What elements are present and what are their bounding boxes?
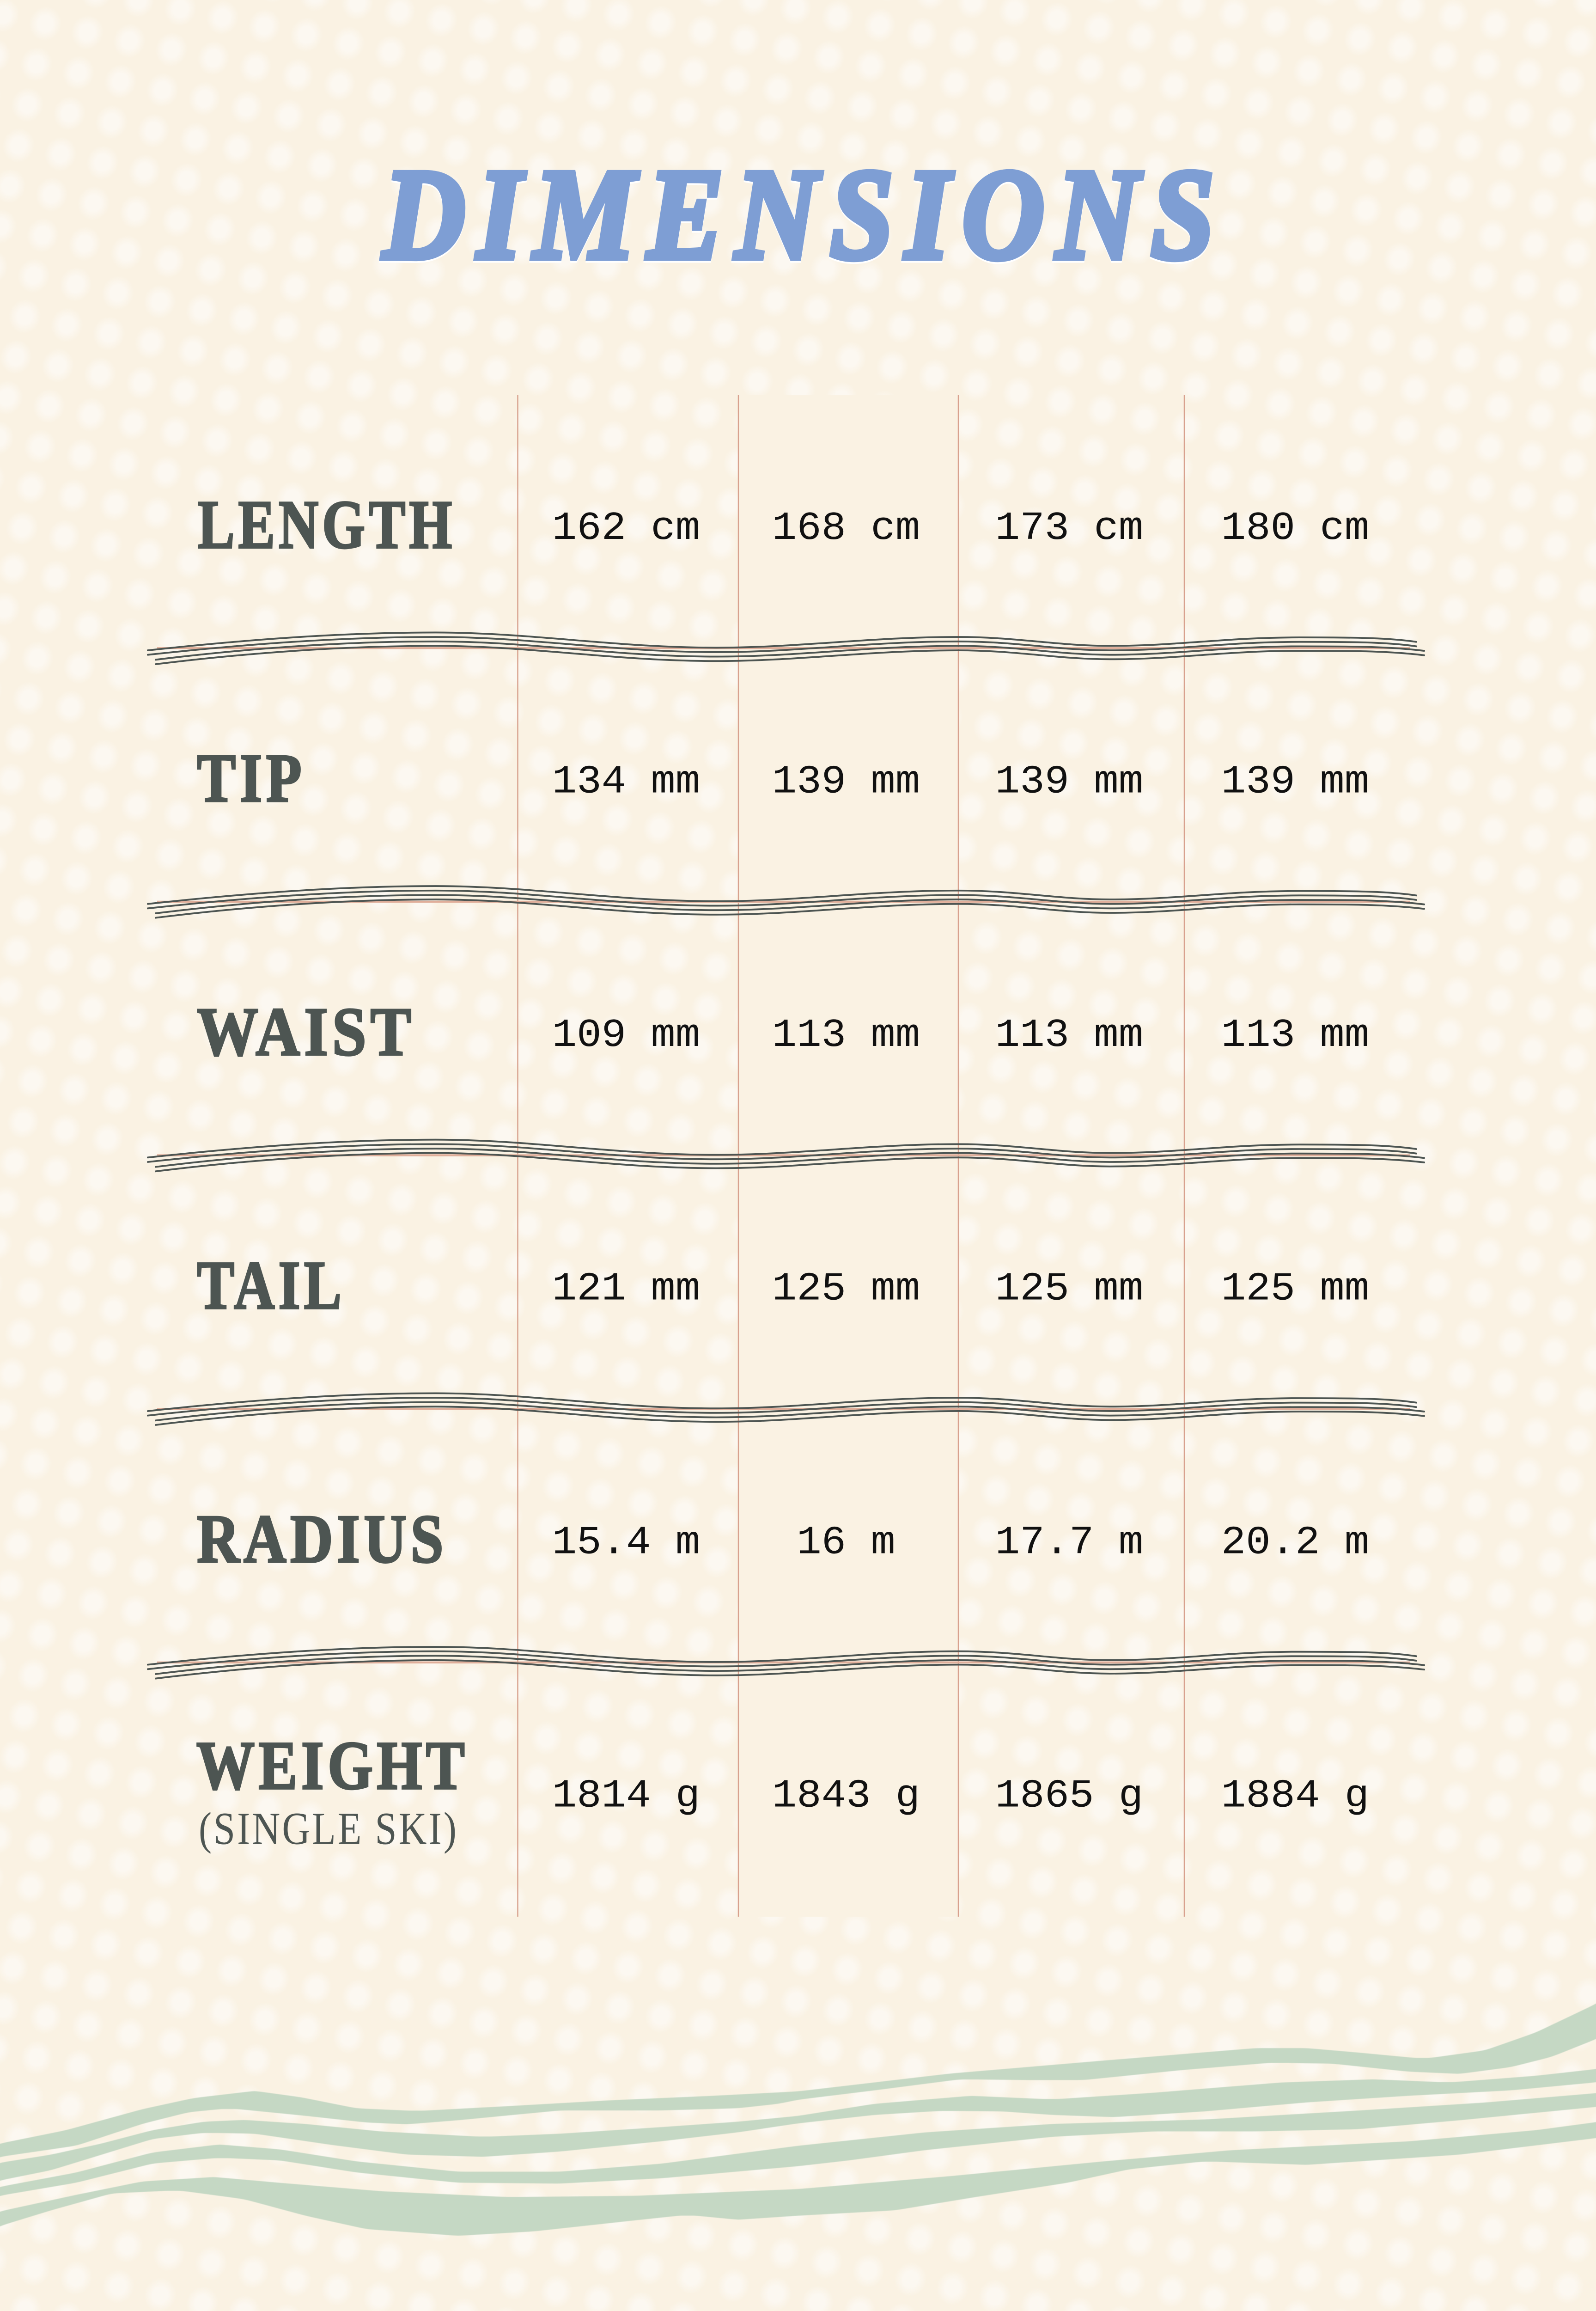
values: tip: 139 mm: [995, 760, 1143, 805]
row: tip: [197, 740, 1369, 816]
values: weight: 1814 g: [552, 1774, 700, 1819]
values: radius: 20.2 m: [1221, 1521, 1369, 1565]
values: waist: [552, 1013, 1369, 1058]
values: tip: 139 mm: [772, 760, 920, 805]
label: waist: WAIST: [197, 993, 415, 1070]
label: weight (single ski): WEIGHT: [196, 1727, 469, 1804]
row: waist: [197, 993, 1369, 1070]
values: length: 162 cm: [552, 506, 700, 551]
values: weight: [552, 1774, 1369, 1819]
values: weight: 1884 g: [1221, 1774, 1369, 1819]
values: waist: 109 mm: [552, 1013, 700, 1058]
values: waist: 113 mm: [995, 1013, 1143, 1058]
values: tail: 125 mm: [772, 1267, 920, 1312]
label: length: LENGTH: [198, 486, 456, 563]
values: length: 173 cm: [995, 506, 1143, 551]
values: tip: 134 mm: [552, 760, 700, 805]
values: tip: 139 mm: [1221, 760, 1369, 805]
values: length: [552, 506, 1369, 551]
values: radius: 15.4 m: [552, 1521, 700, 1565]
label: weight (single ski): [196, 1727, 469, 1854]
label: tip: TIP: [197, 740, 305, 816]
title: DIMENSIONS: [381, 143, 1226, 286]
title: DIMENSIONS: [381, 145, 1226, 288]
values: length: 168 cm: [772, 506, 920, 551]
label: tail: TAIL: [197, 1247, 345, 1323]
values: tail: [552, 1267, 1369, 1312]
decorative green wave bands: [0, 1981, 1596, 2244]
panel: highlighted second column: [738, 395, 958, 1917]
row: radius: [197, 1500, 1369, 1577]
row: length: [198, 486, 1369, 563]
row dividers: wavy lines: [148, 632, 1424, 1679]
values: weight: 1865 g: [995, 1774, 1143, 1819]
row: tail: [197, 1247, 1369, 1323]
label: weight (single ski): (SINGLE SKI): [199, 1803, 458, 1854]
values: waist: 113 mm: [772, 1013, 920, 1058]
values: tail: 121 mm: [552, 1267, 700, 1312]
table: [148, 395, 1424, 1917]
values: weight: 1843 g: [772, 1774, 920, 1819]
values: tip: [552, 760, 1369, 805]
label: radius: RADIUS: [197, 1500, 447, 1577]
values: radius: 17.7 m: [995, 1521, 1143, 1565]
values: radius: [552, 1521, 1369, 1565]
values: tail: 125 mm: [995, 1267, 1143, 1312]
values: tail: 125 mm: [1221, 1267, 1369, 1312]
values: length: 180 cm: [1221, 506, 1369, 551]
column divider lines: [518, 395, 1184, 1917]
values: waist: 113 mm: [1221, 1013, 1369, 1058]
row: weight: [196, 1727, 1369, 1854]
values: radius: 16 m: [797, 1521, 895, 1565]
